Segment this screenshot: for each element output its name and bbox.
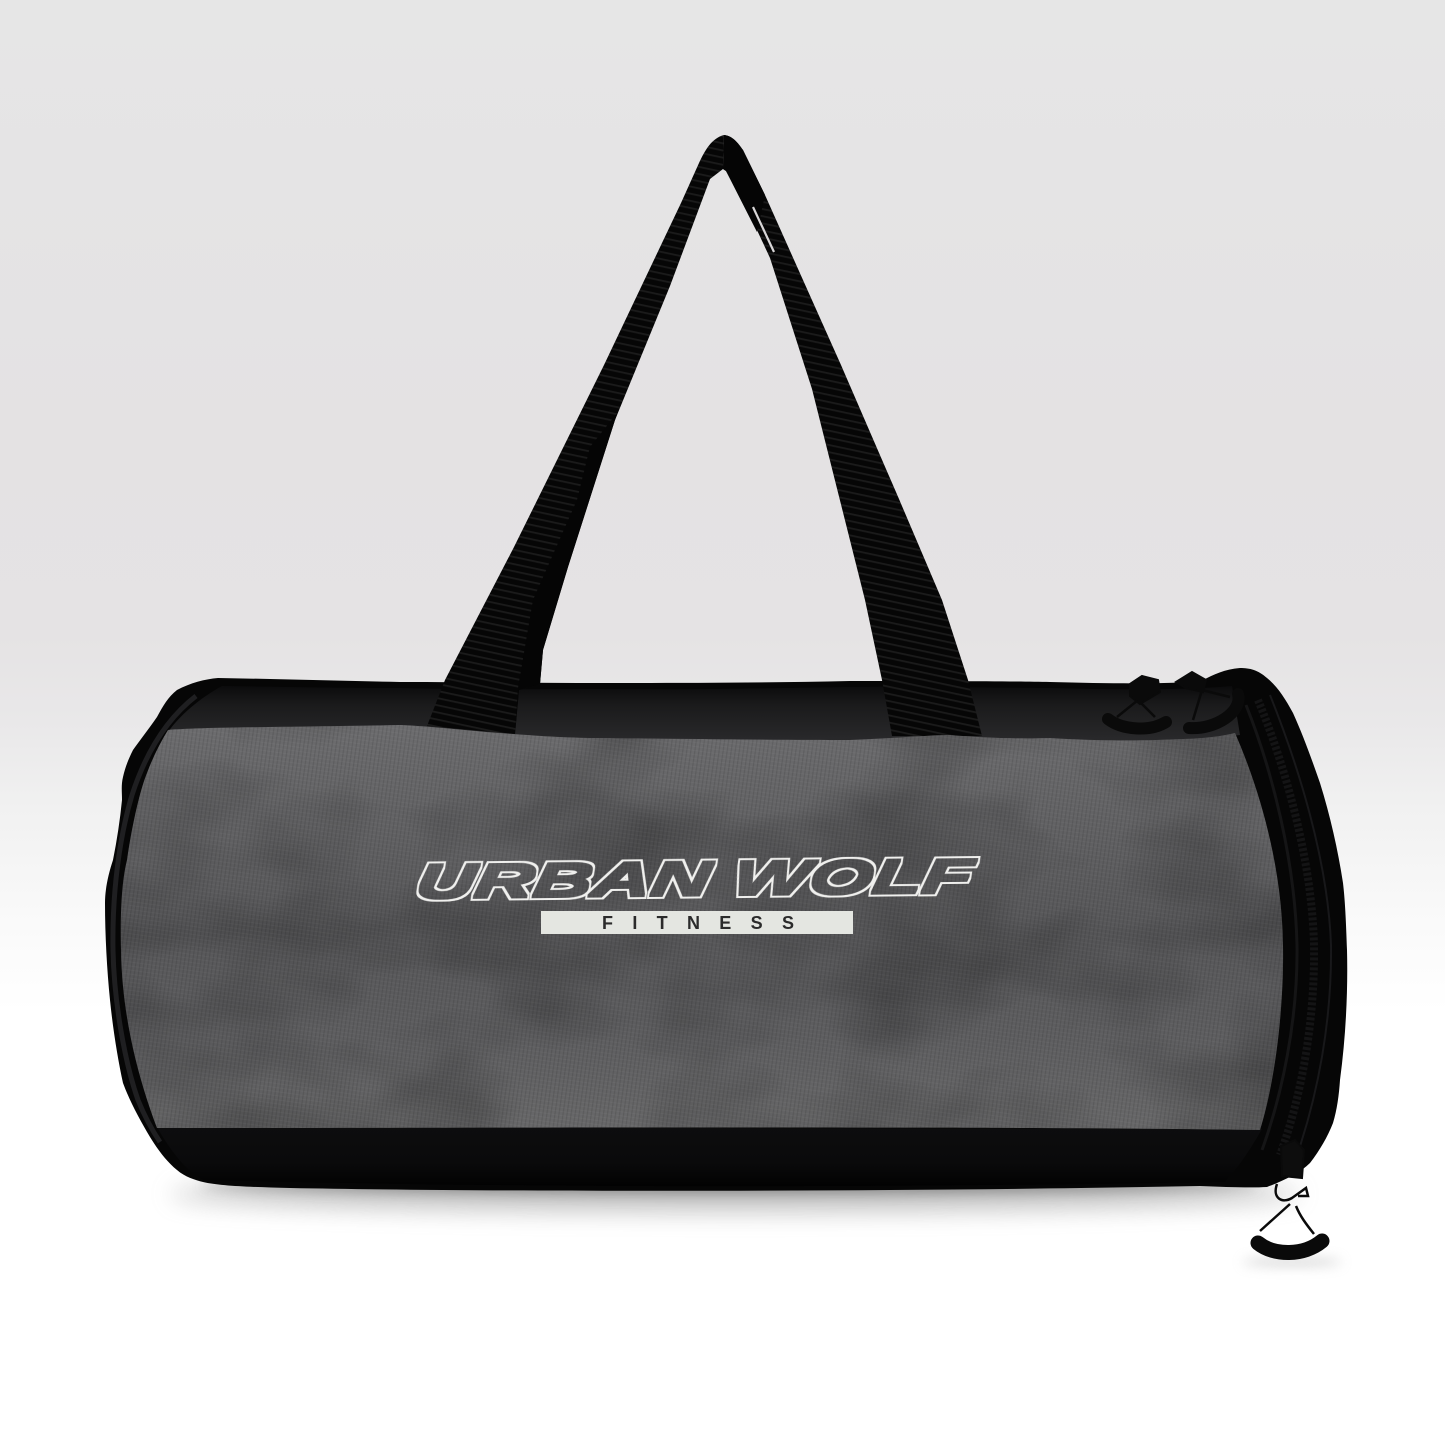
top black band — [168, 686, 1240, 748]
left end seam — [113, 696, 196, 1142]
zipper pull: bottom hanging — [1258, 1140, 1322, 1253]
handle: right strap — [723, 135, 982, 736]
zipper pull: left top — [1108, 676, 1166, 728]
grey panel — [100, 720, 1300, 1140]
handle: left strap — [427, 135, 724, 734]
logo: FITNESS label: FITNESS — [602, 913, 794, 933]
zipper pull: right top — [1176, 672, 1239, 728]
logo: FITNESS label — [541, 911, 853, 934]
bottom black band — [157, 1127, 1262, 1186]
right end zipper lines — [1246, 695, 1331, 1158]
bag body silhouette — [105, 668, 1347, 1191]
logo: URBAN WOLF wordmark: URBAN WOLF — [413, 849, 979, 909]
ground shadow — [170, 1177, 1342, 1266]
